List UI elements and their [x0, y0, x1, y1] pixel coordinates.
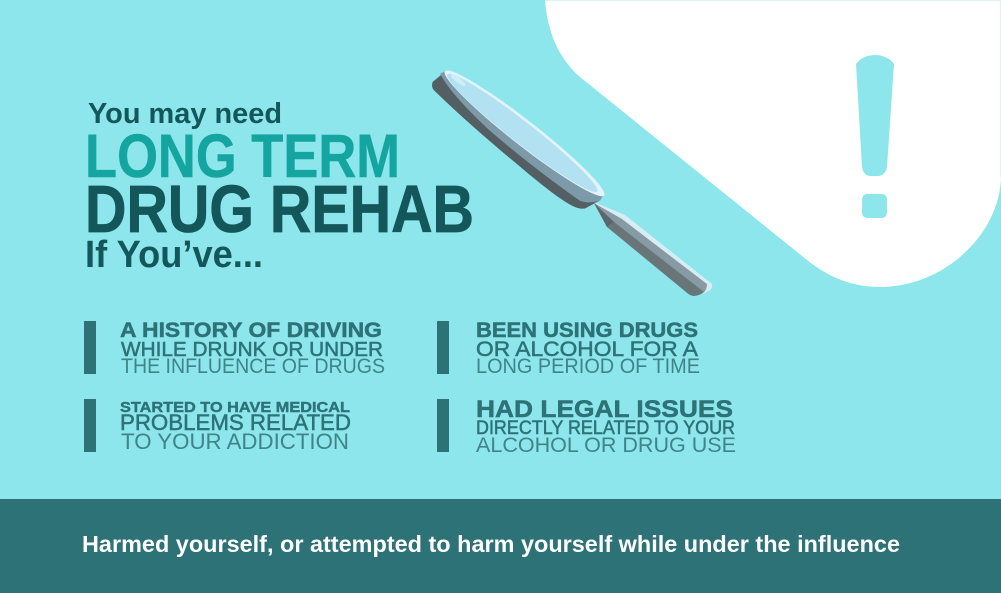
panel: left column of reasons [84, 319, 385, 454]
reason: driving [84, 319, 385, 378]
magnifier lens frame [424, 59, 612, 219]
reason: legal issues: ALCOHOL OR DRUG USE [476, 434, 736, 457]
reason: legal issues: HAD LEGAL ISSUES [476, 396, 733, 423]
reason: medical problems [84, 399, 351, 454]
title line: If You've: If You’ve... [85, 234, 263, 276]
reason: driving: A HISTORY OF DRIVING [120, 319, 382, 342]
footer banner [0, 499, 1001, 593]
icon: magnifying glass [424, 59, 712, 296]
title line: LONG TERM: LONG TERM [85, 122, 400, 190]
reason: long period of use: OR ALCOHOL FOR A [476, 338, 698, 361]
reason: medical problems: TO YOUR ADDICTION [121, 429, 349, 454]
title line: DRUG REHAB: DRUG REHAB [85, 172, 474, 247]
white speech shape [545, 0, 1001, 287]
reason: driving: WHILE DRUNK OR UNDER [121, 339, 383, 361]
icon: exclamation mark [856, 55, 894, 218]
reason: long period of use: BEEN USING DRUGS [476, 319, 698, 342]
footer banner: Harmed yourself, or attempted to harm yourself while under the influence [82, 531, 900, 557]
reason: long period of use [437, 319, 700, 378]
title line: You may need: You may need [88, 98, 282, 130]
title block [85, 98, 474, 276]
reason: legal issues [437, 396, 736, 457]
panel: right column of reasons [437, 319, 736, 457]
reason: medical problems: PROBLEMS RELATED [120, 410, 351, 435]
magnifier handle [594, 202, 712, 296]
reason: legal issues: DIRECTLY RELATED TO YOUR [476, 418, 735, 439]
reason: driving: THE INFLUENCE OF DRUGS [121, 355, 385, 378]
reason: long period of use: LONG PERIOD OF TIME [476, 355, 700, 378]
reason: medical problems: STARTED TO HAVE MEDICAL [120, 400, 350, 416]
